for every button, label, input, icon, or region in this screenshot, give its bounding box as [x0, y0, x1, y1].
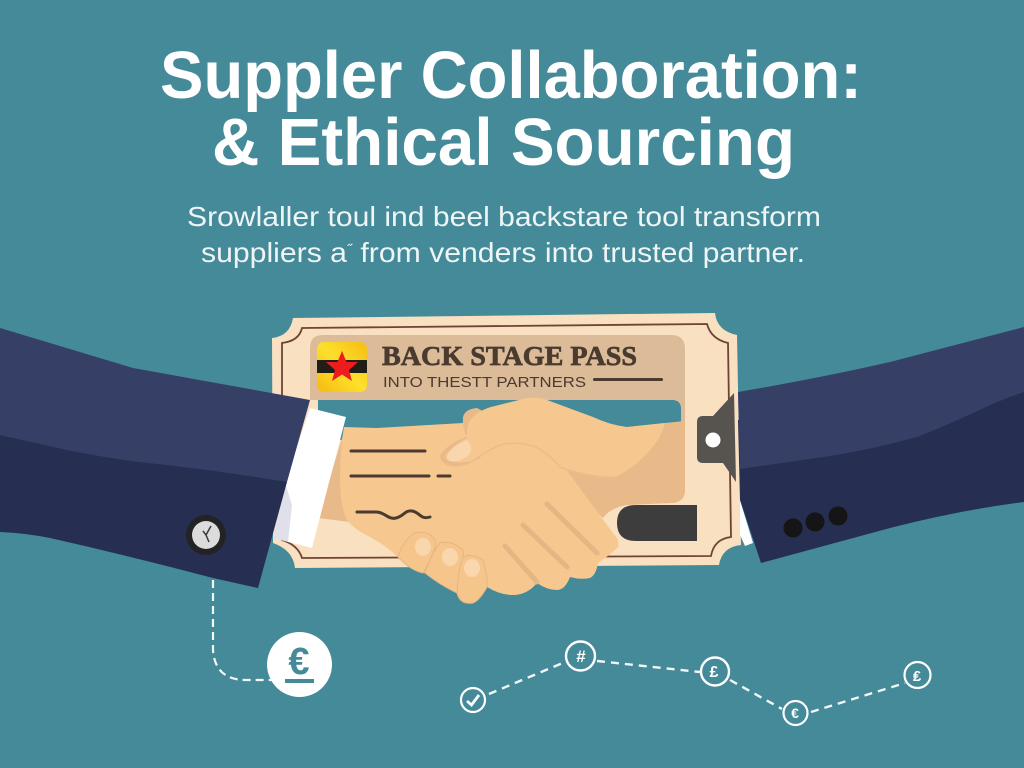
- signature lines on hand: [351, 451, 450, 518]
- timeline node: pound: [701, 658, 729, 686]
- title: Suppler Collaboration:: [160, 38, 862, 113]
- backstage pass ticket: [272, 313, 741, 568]
- handshake: [318, 398, 685, 603]
- hand overlap edge: [473, 443, 615, 477]
- jacket upper right: [738, 327, 1024, 469]
- teal window: [318, 400, 681, 440]
- timeline node: hash: #: [576, 647, 586, 666]
- left sleeve: [0, 328, 346, 588]
- dashed connector to euro badge: [213, 580, 272, 680]
- left hand palm: [340, 423, 618, 603]
- subtitle: Srowlaller toul ind beel backstare tool transform: [187, 201, 821, 232]
- sleeve buttons: [784, 506, 848, 538]
- subtitle: [187, 201, 821, 268]
- shirt cuff left: [273, 408, 346, 548]
- title: & Ethical Sourcing: [212, 105, 795, 180]
- timeline node: lira: [904, 662, 930, 688]
- clip: [697, 393, 736, 482]
- timeline node: euro: €: [791, 705, 799, 721]
- shirt cuff right: [740, 500, 753, 546]
- jacket lower right: [738, 360, 1024, 563]
- subtitle: suppliers a: [201, 237, 336, 268]
- euro badge: €: [288, 641, 310, 683]
- star badge: [317, 342, 367, 392]
- finger creases: [505, 504, 597, 582]
- jacket upper: [0, 328, 310, 482]
- timeline node: euro: [784, 701, 808, 725]
- right hand shadowed underside: [540, 421, 685, 518]
- timeline node: lira: ₤: [913, 668, 922, 685]
- euro badge: [267, 632, 332, 697]
- subtitle: ˝: [347, 241, 353, 257]
- pass rule: [593, 378, 663, 381]
- tan header panel: [310, 335, 685, 503]
- dark tab: [617, 505, 697, 541]
- ticket body: [272, 313, 741, 568]
- cufflink watch: [186, 515, 226, 555]
- thumb nail: [447, 440, 471, 461]
- left hand bottom fingers: [398, 532, 487, 603]
- right hand with thumb: [445, 398, 665, 477]
- timeline node: pound: £: [710, 664, 719, 681]
- left wrist shadow: [318, 428, 350, 522]
- dashed timeline: [489, 661, 905, 712]
- right sleeve: [738, 327, 1024, 563]
- fingernails: [415, 538, 480, 577]
- subtitle: from venders into trusted partner.: [352, 237, 805, 268]
- pass heading: BACK STAGE PASS: [382, 341, 637, 371]
- ticket inner border: [282, 324, 731, 558]
- timeline node: hash: [566, 642, 595, 670]
- thumb shadow: [440, 408, 500, 466]
- pass subheading: INTO THESTT PARTNERS: [383, 375, 586, 391]
- timeline node: check: [461, 688, 485, 712]
- title: [160, 38, 862, 180]
- jacket lower: [0, 400, 287, 588]
